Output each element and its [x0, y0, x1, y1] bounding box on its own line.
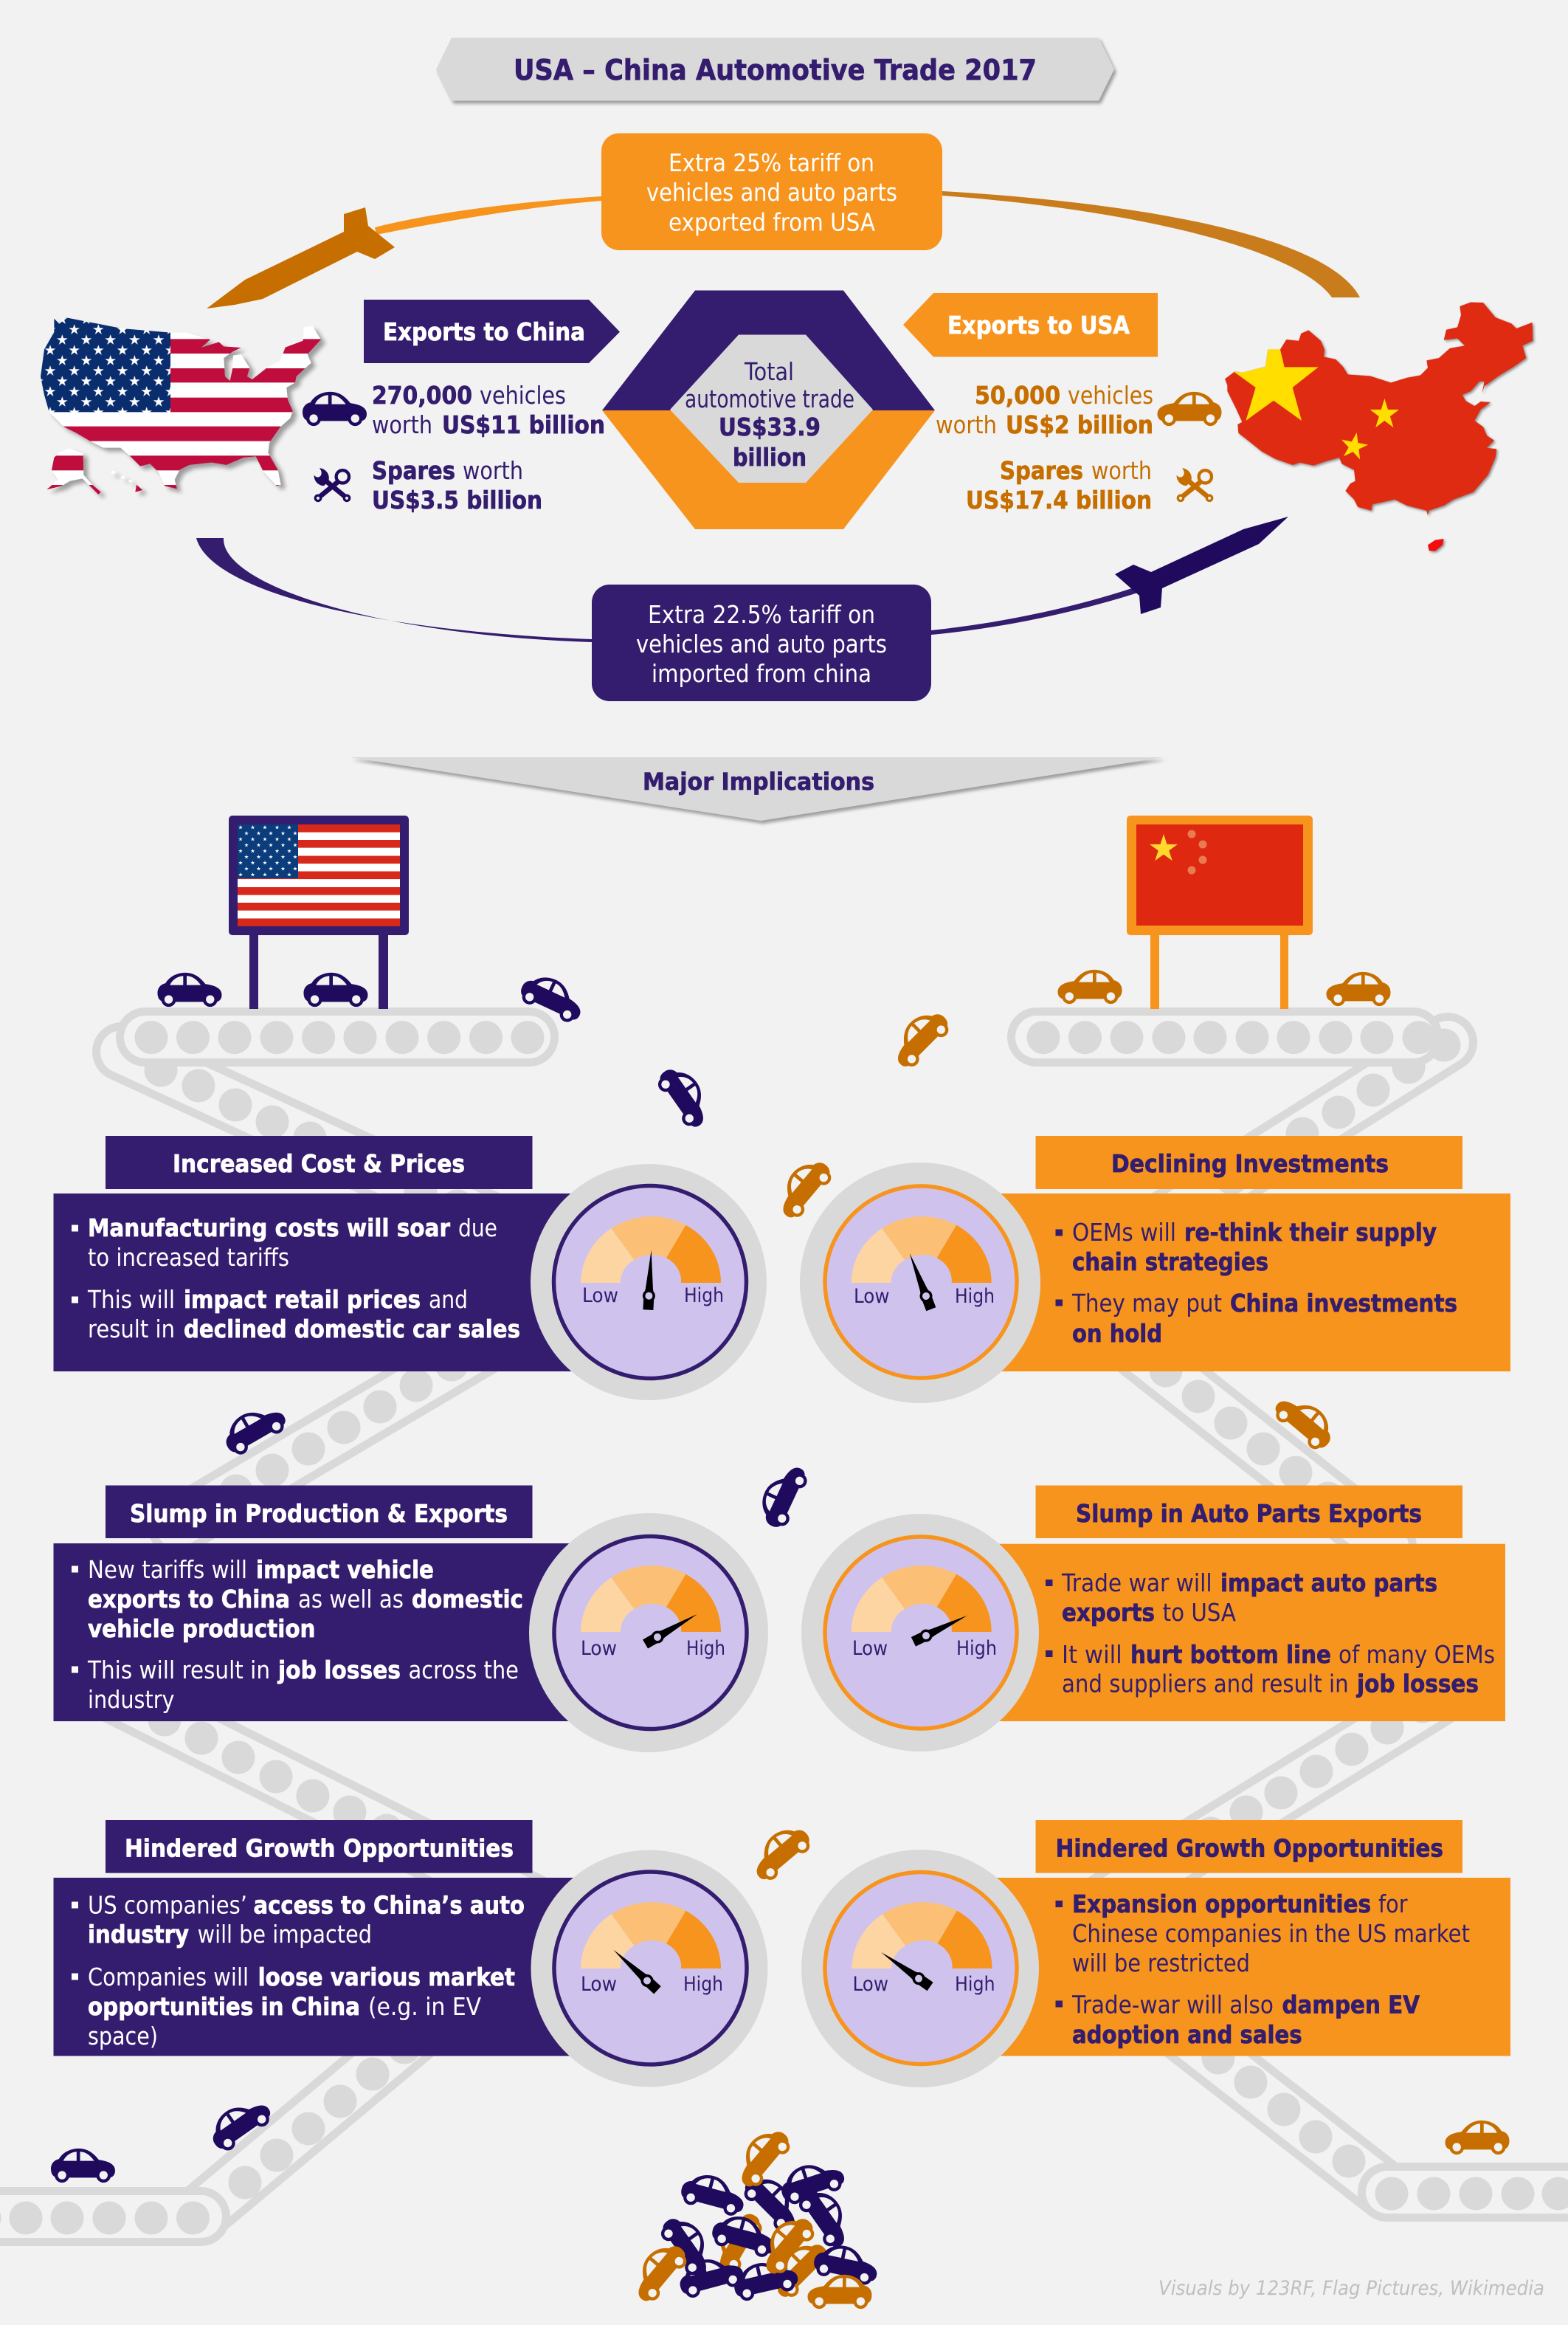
- label: exports to China: Exports to China: [383, 317, 585, 346]
- callout: extra 22.5% tariff: vehicles and auto parts: [636, 630, 887, 658]
- panel: slump in production and exports: job losses: [277, 1656, 401, 1684]
- panel: increased cost and prices: Increased Cost & Prices: [173, 1149, 465, 1178]
- stat: vehicles exported to USA: worth: [936, 410, 997, 439]
- panel: hindered growth opportunities, USA: [53, 1820, 629, 2056]
- gauge: increased cost and prices: [531, 1164, 767, 1400]
- stat: vehicles exported to China: US$11 billion: [442, 410, 605, 439]
- panel: hindered growth opportunities, USA: opportunities in China: [88, 1992, 360, 2021]
- panel: slump in auto parts exports: hurt bottom line: [1130, 1640, 1331, 1669]
- panel: declining investments: China investments: [1230, 1289, 1457, 1318]
- panel: slump in auto parts exports: exports: [1062, 1598, 1155, 1627]
- gauge: declining investments: [800, 1162, 1040, 1403]
- billboard: China flag: [1127, 816, 1313, 1009]
- banner: major implications: [350, 757, 1164, 821]
- stat: vehicles exported to USA: vehicles: [1068, 381, 1153, 410]
- gauge: slump in auto parts exports: Low: [852, 1637, 888, 1660]
- panel: declining investments: chain strategies: [1072, 1247, 1268, 1276]
- gauge: slump in production and exports: [529, 1513, 768, 1752]
- stat: spares exported to USA: US$17.4 billion: [966, 486, 1152, 514]
- callout: extra 22.5% tariff: Extra 22.5% tariff on: [648, 600, 875, 629]
- stat: spares exported to USA: worth: [1091, 456, 1152, 485]
- panel: hindered growth opportunities, USA: space): [88, 2022, 158, 2050]
- stat: vehicles exported to USA: US$2 billion: [1006, 410, 1153, 439]
- panel: declining investments: [959, 1136, 1510, 1371]
- map: USA with flag: [30, 312, 328, 502]
- panel: slump in production and exports: [53, 1485, 629, 1721]
- panel: hindered growth opportunities, China: will be restricted: [1072, 1949, 1250, 1977]
- panel: increased cost and prices: declined domestic car sales: [184, 1315, 520, 1343]
- panel: increased cost and prices: to increased tariffs: [88, 1243, 289, 1272]
- label: exports to USA: Exports to USA: [947, 311, 1130, 340]
- map: China with stars: [1225, 302, 1533, 551]
- panel: slump in production and exports: New tariffs will: [88, 1555, 247, 1584]
- icon: orange rocket: [207, 207, 395, 309]
- panel: declining investments: OEMs will: [1072, 1218, 1176, 1247]
- panel: hindered growth opportunities, China: [959, 1820, 1510, 2056]
- callout: extra 22.5% tariff: [592, 585, 931, 701]
- panel: slump in production and exports: domestic: [412, 1585, 523, 1613]
- stat: vehicles exported to China: vehicles: [480, 381, 566, 410]
- panel: hindered growth opportunities, China: Chinese companies in the US market: [1072, 1919, 1470, 1948]
- arc: orange tariff arrow to rocket: [375, 196, 601, 235]
- panel: increased cost and prices: result in: [88, 1315, 175, 1343]
- panel: increased cost and prices: Manufacturing costs will soar: [88, 1213, 451, 1242]
- gauge: slump in auto parts exports: [801, 1514, 1039, 1752]
- stat: spares exported to USA: [966, 456, 1152, 514]
- panel: declining investments: on hold: [1072, 1319, 1162, 1348]
- gauge: declining investments: High: [955, 1285, 995, 1308]
- arc: purple tariff arrow to rocket: [931, 587, 1138, 635]
- hexagon: total automotive trade: [602, 291, 935, 529]
- panel: slump in production and exports: Slump in Production & Exports: [130, 1499, 508, 1528]
- callout: extra 25% tariff: [601, 133, 942, 250]
- panel: hindered growth opportunities, USA: US companies’: [88, 1891, 247, 1920]
- panel: hindered growth opportunities, USA: will be impacted: [198, 1920, 372, 1949]
- panel: hindered growth opportunities, China: Trade-war will also: [1071, 1990, 1274, 2019]
- panel: slump in auto parts exports: and suppliers and result in: [1062, 1670, 1349, 1698]
- icon: tools, exports to USA: [1177, 468, 1213, 502]
- panel: hindered growth opportunities, China: Hindered Growth Opportunities: [1056, 1834, 1443, 1863]
- icon: purple rocket: [1115, 517, 1288, 614]
- panel: slump in auto parts exports: job losses: [1355, 1670, 1479, 1698]
- panel: declining investments: They may put: [1071, 1289, 1222, 1318]
- panel: slump in production and exports: industry: [88, 1685, 174, 1714]
- stat: vehicles exported to China: worth: [372, 410, 432, 439]
- panel: hindered growth opportunities, USA: Hindered Growth Opportunities: [125, 1834, 514, 1863]
- gauge: hindered growth opportunities, China: High: [955, 1973, 995, 1996]
- stat: spares exported to USA: Spares: [1000, 456, 1083, 485]
- panel: slump in auto parts exports: Slump in Auto Parts Exports: [1076, 1499, 1422, 1528]
- label: exports to USA: [903, 293, 1158, 357]
- panel: hindered growth opportunities, USA: Companies will: [88, 1963, 249, 1991]
- stat: spares exported to China: Spares: [372, 456, 455, 485]
- panel: hindered growth opportunities, USA: access to China’s auto: [254, 1891, 525, 1920]
- label: exports to China: [364, 300, 620, 363]
- stat: vehicles exported to USA: [936, 381, 1153, 439]
- gauge: increased cost and prices: Low: [582, 1284, 618, 1307]
- panel: hindered growth opportunities, China: dampen EV: [1282, 1990, 1420, 2019]
- arc: purple tariff arrow from USA: [196, 538, 592, 642]
- callout: extra 25% tariff: exported from USA: [669, 208, 875, 236]
- hexagon: total automotive trade: Total: [744, 357, 794, 386]
- callout: extra 25% tariff: vehicles and auto parts: [646, 178, 897, 207]
- arc: orange tariff arrow to China: [942, 191, 1360, 297]
- icon: pile of cars: [624, 2121, 881, 2309]
- panel: slump in auto parts exports: [959, 1485, 1505, 1721]
- title banner: [436, 38, 1114, 100]
- panel: slump in production and exports: This will result in: [87, 1656, 270, 1684]
- stat: spares exported to China: [372, 456, 542, 514]
- gauge: slump in production and exports: Low: [581, 1637, 617, 1660]
- stat: spares exported to China: worth: [463, 456, 523, 485]
- panel: increased cost and prices: due: [458, 1213, 497, 1242]
- panel: increased cost and prices: and: [429, 1285, 468, 1314]
- panel: hindered growth opportunities, China: for: [1378, 1890, 1408, 1918]
- panel: slump in production and exports: exports to China: [88, 1585, 290, 1613]
- gauge: slump in production and exports: High: [686, 1637, 725, 1660]
- icon: tools, exports to China: [314, 468, 350, 502]
- panel: slump in auto parts exports: Trade war will: [1061, 1568, 1212, 1597]
- cars: orange on the right conveyor: [745, 970, 1509, 2154]
- icon: car, exports to China: [303, 392, 367, 426]
- panel: hindered growth opportunities, China: Expansion opportunities: [1072, 1890, 1371, 1918]
- callout: extra 22.5% tariff: imported from china: [652, 659, 871, 688]
- stat: vehicles exported to USA: 50,000: [975, 381, 1060, 410]
- panel: hindered growth opportunities, USA: loose various market: [258, 1963, 515, 1991]
- gauge: slump in auto parts exports: High: [956, 1637, 997, 1660]
- hexagon: total automotive trade: automotive trade: [685, 385, 854, 413]
- stat: vehicles exported to China: [372, 381, 605, 439]
- conveyor: right zigzag: [1027, 1021, 1568, 2210]
- gauge: hindered growth opportunities, USA: Low: [581, 1973, 617, 1996]
- gauge: hindered growth opportunities, USA: High: [683, 1973, 723, 1996]
- gauge: declining investments: Low: [854, 1285, 890, 1308]
- panel: declining investments: re-think their supply: [1184, 1218, 1437, 1247]
- panel: increased cost and prices: impact retail prices: [184, 1285, 421, 1314]
- hexagon: total automotive trade: US$33.9: [719, 413, 821, 441]
- panel: slump in auto parts exports: It will: [1062, 1640, 1122, 1669]
- stat: spares exported to China: US$3.5 billion: [372, 486, 542, 514]
- panel: increased cost and prices: This will: [87, 1285, 175, 1314]
- gauge: hindered growth opportunities, China: Low: [853, 1973, 888, 1996]
- icon: car, exports to USA: [1157, 392, 1222, 426]
- panel: slump in auto parts exports: impact auto parts: [1220, 1568, 1437, 1597]
- hexagon: total automotive trade: billion: [733, 443, 807, 472]
- gauge: hindered growth opportunities, USA: [531, 1850, 767, 2087]
- conveyor: left zigzag: [0, 1021, 545, 2235]
- panel: slump in production and exports: as well as: [298, 1585, 404, 1613]
- billboard: US flag: [229, 816, 409, 1009]
- cars: purple on the left conveyor: [51, 968, 811, 2183]
- panel: slump in auto parts exports: to USA: [1163, 1598, 1236, 1627]
- panel: increased cost and prices: [53, 1136, 629, 1371]
- gauge: increased cost and prices: High: [684, 1284, 724, 1307]
- panel: slump in auto parts exports: of many OEMs: [1339, 1640, 1495, 1669]
- panel: slump in production and exports: across the: [409, 1656, 519, 1684]
- panel: slump in production and exports: vehicle production: [88, 1614, 316, 1643]
- gauge: hindered growth opportunities, China: [801, 1850, 1039, 2087]
- panel: slump in production and exports: impact vehicle: [256, 1555, 434, 1584]
- callout: extra 25% tariff: Extra 25% tariff on: [669, 148, 874, 177]
- banner: major implications: Major Implications: [643, 768, 874, 796]
- panel: hindered growth opportunities, China: adoption and sales: [1072, 2020, 1302, 2049]
- panel: declining investments: Declining Investments: [1111, 1149, 1389, 1178]
- panel: hindered growth opportunities, USA: industry: [88, 1920, 189, 1949]
- title banner: USA – China Automotive Trade 2017: [514, 54, 1037, 86]
- panel: hindered growth opportunities, USA: (e.g. in EV: [368, 1992, 481, 2021]
- stat: vehicles exported to China: 270,000: [372, 381, 472, 410]
